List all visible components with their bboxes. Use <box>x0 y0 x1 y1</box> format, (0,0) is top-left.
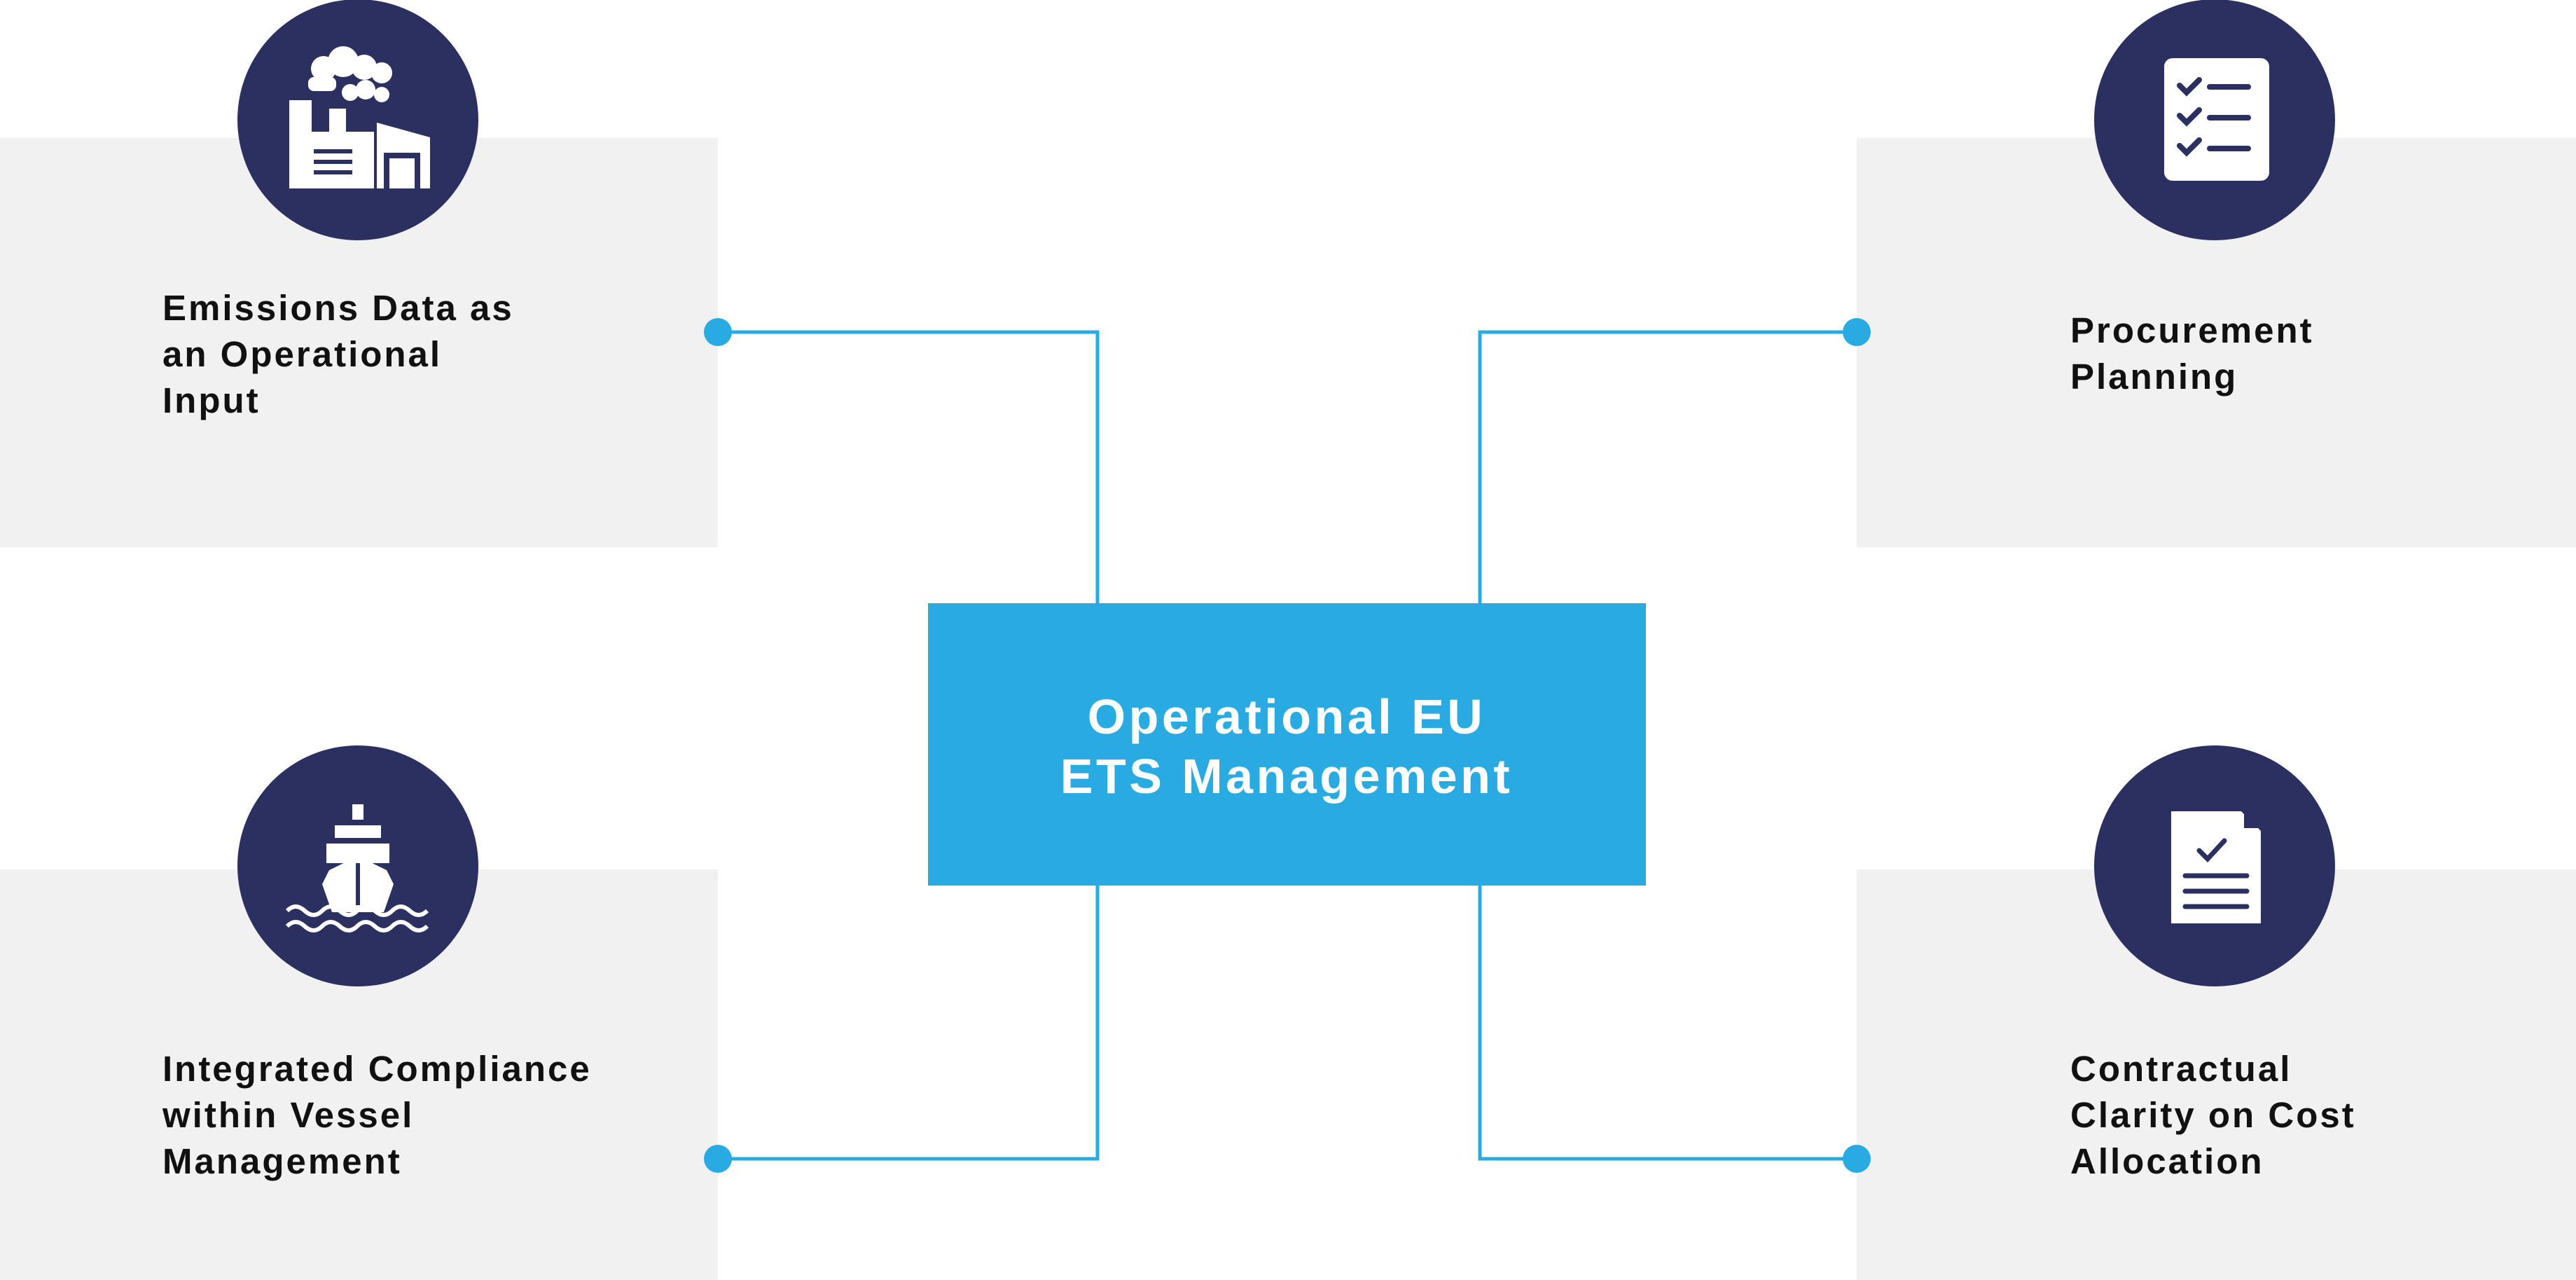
panel: emissions data <box>0 138 718 547</box>
text: procurement planning: Planning <box>2070 357 2238 397</box>
panel: contractual clarity <box>1857 869 2576 1280</box>
connector dots <box>704 318 1871 1173</box>
text: emissions data: Input <box>162 380 261 420</box>
text: integrated compliance: Management <box>162 1141 402 1181</box>
center box <box>928 603 1646 886</box>
text: contractual clarity: Clarity on Cost <box>2070 1095 2356 1135</box>
center title: ETS Management <box>1060 749 1513 804</box>
connector lines <box>718 332 1857 1159</box>
text: integrated compliance: Integrated Compliance <box>162 1049 592 1089</box>
text: emissions data: an Operational <box>162 334 442 374</box>
center title: Operational EU <box>1088 689 1486 744</box>
text: contractual clarity: Allocation <box>2070 1141 2264 1181</box>
text: contractual clarity: Contractual <box>2070 1049 2292 1089</box>
icon: ship <box>237 745 478 986</box>
icon: factory <box>237 0 478 240</box>
text: emissions data: Emissions Data as <box>162 288 514 328</box>
text: procurement planning: Procurement <box>2070 310 2314 350</box>
panel: procurement planning <box>1857 138 2576 547</box>
text: integrated compliance: within Vessel <box>162 1095 414 1135</box>
icon: checklist <box>2094 0 2335 240</box>
icon: contract document <box>2094 745 2335 986</box>
panel: integrated compliance <box>0 869 718 1280</box>
